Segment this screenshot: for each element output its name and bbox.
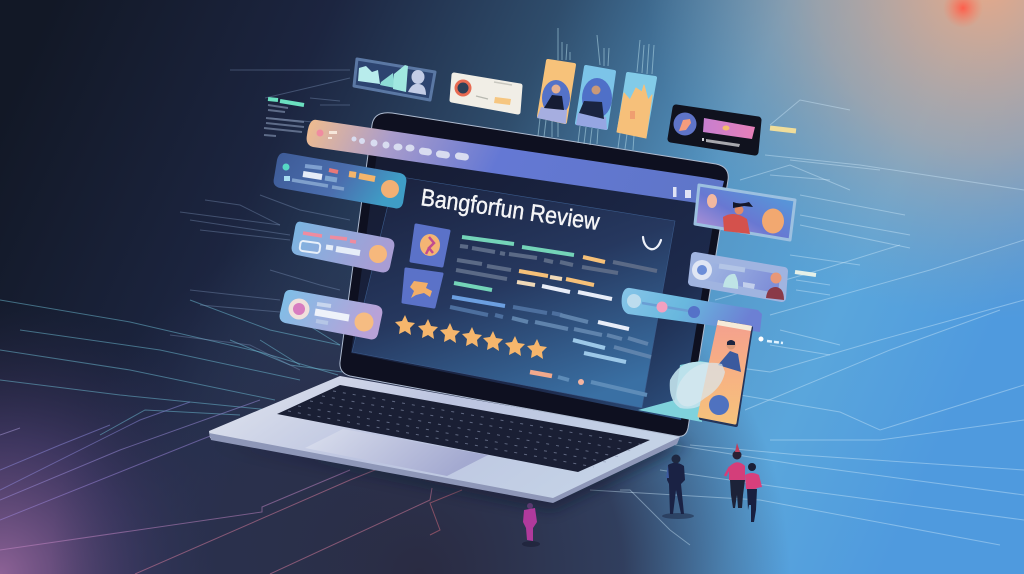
card: app row 2 (292, 222, 394, 272)
laptop base deck (209, 376, 680, 502)
data tag: right of dark card (770, 128, 796, 131)
avatar tile 1 (411, 225, 449, 266)
laptop (209, 113, 728, 510)
text lines: review content (450, 237, 657, 395)
person: small pink figure (745, 463, 762, 522)
data tag: beside phone (758, 336, 783, 343)
card: white profile (452, 75, 520, 112)
laptop shadow (215, 440, 690, 510)
title: Bangforfun Review (419, 184, 602, 236)
trackpad (305, 429, 488, 476)
loading arc icon (643, 237, 661, 249)
phone card 3 (617, 40, 655, 150)
teal floating wave (638, 361, 726, 422)
data tag: right of user card (795, 272, 816, 275)
circuit lines: left floor (0, 300, 462, 574)
card: girl avatar (695, 185, 795, 240)
person: bottom centre purple figure (522, 503, 540, 547)
phone card 2 (576, 35, 614, 145)
card: dark media (671, 108, 758, 152)
screen surface (351, 145, 719, 420)
screen bezel (340, 113, 728, 436)
laptop front edge (209, 433, 680, 503)
card: app row 1 (274, 153, 406, 208)
circuit lines: right side (590, 100, 1024, 545)
card: app row 3 (280, 290, 382, 339)
star rating (395, 315, 547, 359)
phone card 1 (537, 28, 574, 137)
card: slider (622, 288, 762, 332)
browser bar (307, 120, 724, 206)
avatar tile 2 (403, 269, 442, 307)
phone card: bottom right (699, 320, 752, 425)
person: dark outfit figure (662, 454, 694, 519)
review panel (352, 176, 675, 408)
keyboard (277, 385, 650, 472)
circuit lines: left wall (170, 70, 380, 370)
code snippet: upper left (264, 99, 304, 136)
person: pink figure (725, 443, 745, 508)
card: user profile (692, 256, 784, 300)
card: bar chart (354, 59, 435, 100)
soft fabric overlay (676, 363, 725, 406)
